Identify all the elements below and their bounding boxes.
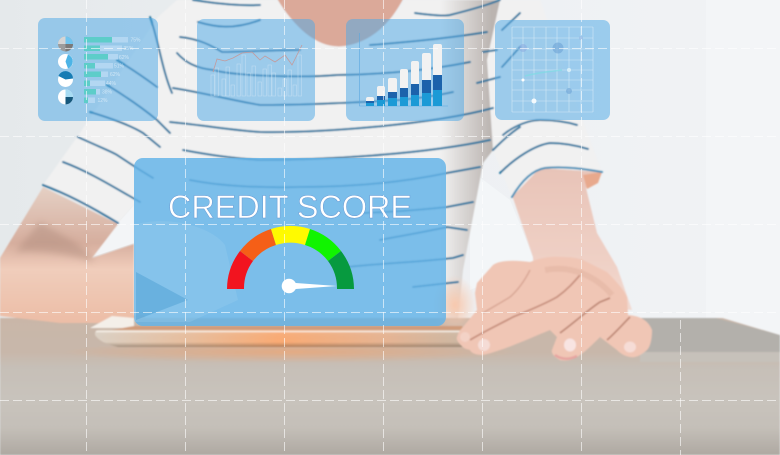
gauge: [227, 226, 354, 293]
shirt stripes: [43, 0, 602, 287]
panel: line and column chart: [197, 19, 315, 121]
bar percentage labels: 51%: [114, 64, 125, 70]
bar percentage labels: 44%: [106, 81, 117, 87]
panel: stacked bar chart: [346, 19, 464, 121]
peach glow next to hand: [433, 275, 477, 335]
chart axes: [360, 33, 448, 106]
shirt: [43, 0, 602, 315]
bar percentage labels: 35%: [124, 46, 134, 52]
trend line: [213, 45, 302, 72]
panel: pie charts and horizontal bars: [38, 18, 158, 121]
bar percentage labels: 62%: [119, 55, 130, 61]
bar percentage labels: 62%: [110, 72, 121, 78]
title: CREDIT SCORE: [168, 189, 412, 225]
horizontal bar chart: [84, 37, 128, 103]
right hand: [457, 257, 652, 361]
column outlines: [211, 55, 302, 96]
scatter points: [519, 36, 583, 104]
gauge needle: [282, 279, 337, 293]
left arm: [0, 187, 145, 323]
grid: [512, 27, 593, 112]
panel: scatter grid chart: [495, 20, 610, 120]
bar percentage labels: [98, 38, 141, 104]
tablet: [90, 316, 466, 347]
table top: [0, 318, 780, 455]
faint hand reflection: [134, 221, 238, 322]
right arm: [512, 168, 632, 310]
neck: [275, 0, 405, 47]
icons: four pie charts: [58, 36, 73, 104]
bar percentage labels: 12%: [98, 98, 108, 104]
bar percentage labels: 38%: [102, 90, 113, 96]
bar percentage labels: 75%: [130, 38, 141, 44]
panel: credit score: [134, 158, 446, 326]
stacked bars: [366, 44, 442, 106]
